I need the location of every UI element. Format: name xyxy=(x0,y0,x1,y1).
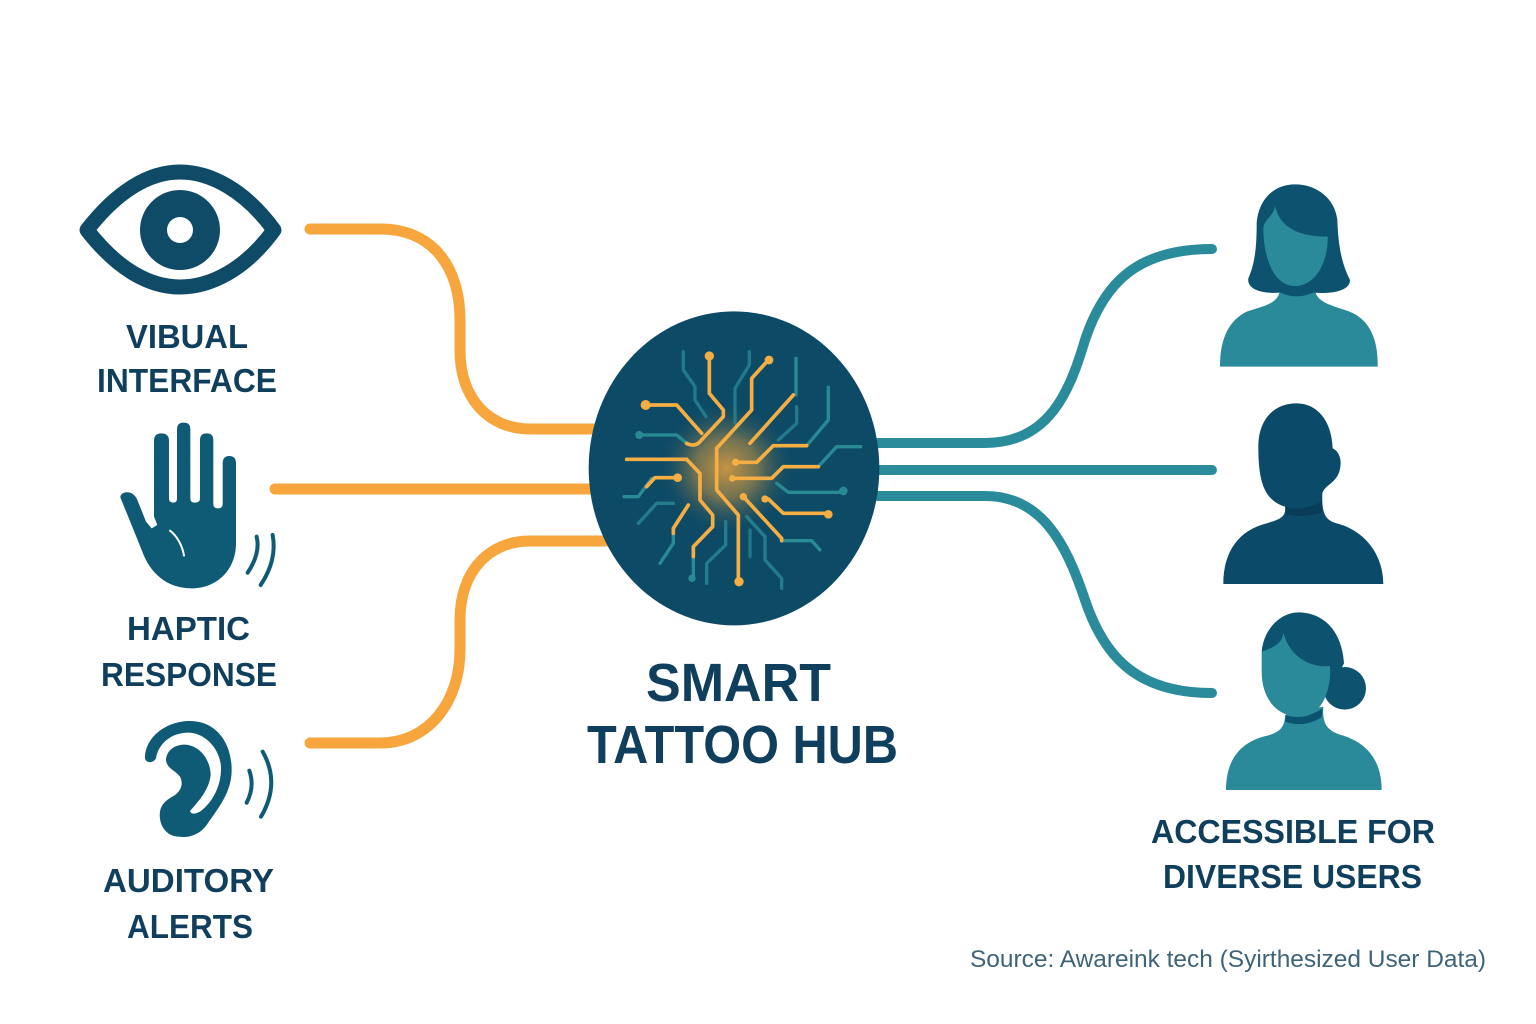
source note: Source: Awareink tech (Syirthesized User Data) xyxy=(970,946,1486,973)
label: auditory alerts: ALERTS xyxy=(127,908,253,945)
label: visual interface xyxy=(97,318,277,399)
icon: user with hair bun xyxy=(1226,612,1382,790)
label: visual interface: INTERFACE xyxy=(97,362,277,399)
title: smart tattoo hub: TATTOO HUB xyxy=(587,715,898,775)
connector: hub to user two xyxy=(878,465,1212,475)
icon: eye xyxy=(87,172,274,287)
label: auditory alerts: AUDITORY xyxy=(103,862,274,899)
icon: user with bob haircut xyxy=(1220,184,1378,367)
connector: visual interface to hub xyxy=(310,229,594,429)
icon: hand xyxy=(120,423,274,588)
label: accessible for diverse users xyxy=(1151,813,1435,895)
circuit nodes: orange xyxy=(641,351,833,586)
glow xyxy=(657,402,797,535)
icon: user with short hair xyxy=(1223,403,1383,584)
connector: auditory alerts to hub xyxy=(310,541,606,743)
connector: hub to user three xyxy=(878,496,1212,693)
connector: hub to user one xyxy=(878,249,1212,443)
circuit nodes: teal xyxy=(635,431,848,582)
central hub: circuit circle xyxy=(589,311,879,625)
label: auditory alerts xyxy=(103,862,274,945)
title: smart tattoo hub: SMART xyxy=(646,653,831,713)
icon: ear xyxy=(145,721,271,837)
label: visual interface: VIBUAL xyxy=(126,318,248,355)
label: accessible for diverse users: ACCESSIBLE FOR xyxy=(1151,813,1435,850)
title: smart tattoo hub xyxy=(587,653,898,775)
circuit traces: orange xyxy=(627,357,828,582)
label: haptic response: RESPONSE xyxy=(101,656,277,693)
connector: haptic response to hub xyxy=(275,484,592,494)
label: haptic response: HAPTIC xyxy=(127,610,250,647)
label: haptic response xyxy=(101,610,277,693)
circuit traces: teal xyxy=(624,352,861,588)
label: accessible for diverse users: DIVERSE USERS xyxy=(1163,858,1422,895)
